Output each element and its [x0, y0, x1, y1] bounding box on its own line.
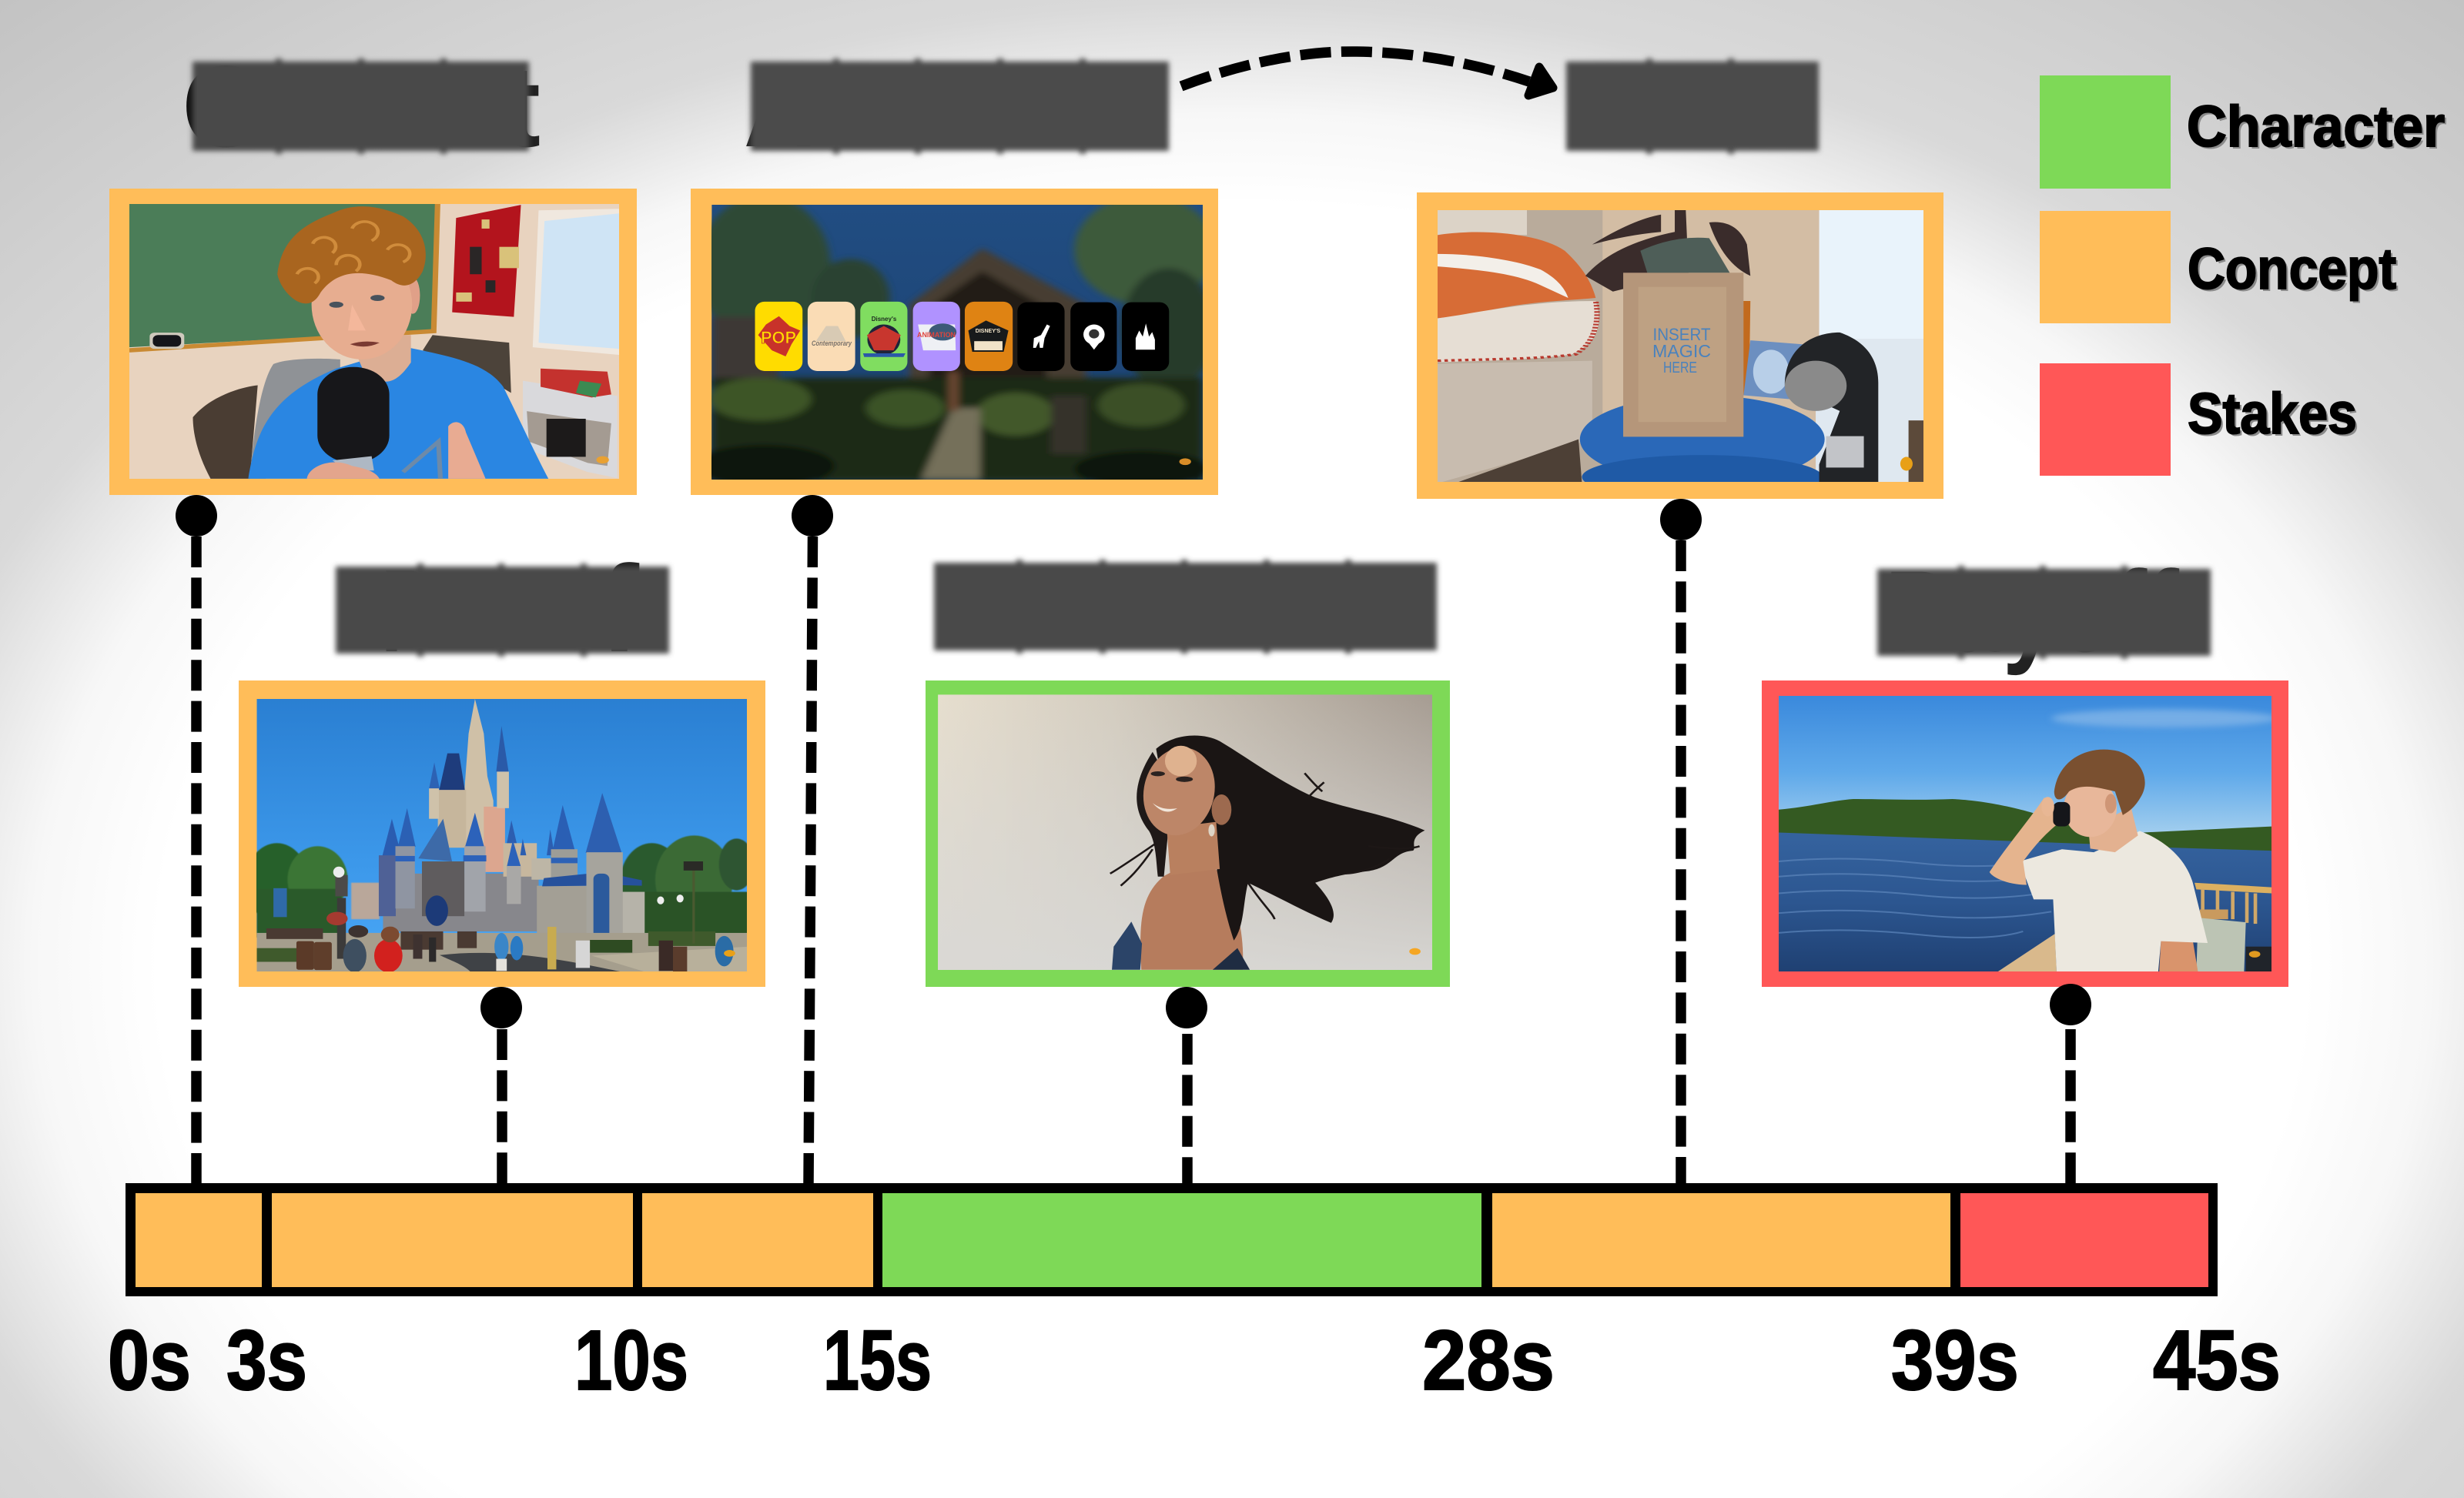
legend swatch: Concept	[2040, 211, 2171, 323]
photo: wooden frame on blue stool: HERE	[1663, 359, 1697, 376]
heading 1: redacted with blur	[182, 42, 541, 171]
arrow: dashed curve between headings	[1181, 52, 1553, 95]
segment: 10s to 15s concept	[642, 1193, 873, 1287]
panel: character frame (woman with flowing hair)	[926, 680, 1450, 987]
photo: resort lodge with brand cards: POP	[761, 328, 796, 347]
legend	[2040, 75, 2447, 476]
legend label: Stakes: Stakes	[2188, 381, 2357, 446]
panel: stakes frame (man on phone by the lake)	[1762, 680, 2288, 987]
label 10s: 10s	[574, 1313, 688, 1408]
heading 4: redacted with blur: P	[381, 546, 431, 677]
connector 4: dot and dashed line	[480, 987, 522, 1183]
photo: resort lodge with brand cards: Contemporary	[812, 339, 852, 347]
photo: wooden frame on blue stool: INSERT	[1652, 325, 1711, 344]
heading 4: redacted with blur: f	[601, 540, 640, 677]
photo: resort lodge with brand cards: ANIMATION	[917, 331, 956, 339]
timeline bar	[126, 1183, 2218, 1296]
photo: resort lodge with brand cards	[711, 205, 1203, 480]
connector 2: dot and dashed line	[792, 495, 833, 1183]
segment: 0s to 3s concept	[136, 1193, 262, 1287]
photo: woman turning with hair flying	[938, 694, 1433, 970]
photo: fairytale castle under blue sky	[245, 699, 755, 973]
heading 3: redacted with blur	[1566, 59, 1819, 154]
label 3s: 3s	[226, 1313, 307, 1408]
heading 1: redacted with blur: t	[502, 42, 541, 171]
segment: 15s to 28s character	[882, 1193, 1481, 1287]
heading 4: redacted with blur	[336, 540, 669, 677]
panel: concept frame (castle)	[239, 680, 765, 987]
photo: presenter with microphone	[129, 204, 621, 479]
time axis labels	[108, 1313, 2281, 1408]
panel: hook frame 1 (presenter)	[109, 189, 637, 495]
photo: man on phone beside water	[1779, 696, 2278, 972]
photo: wooden frame on blue stool	[1438, 210, 1926, 499]
legend label: Character: Character	[2187, 94, 2445, 159]
photo: resort lodge with brand cards: DISNEY'S	[976, 329, 1001, 334]
legend label: Concept: Concept	[2190, 239, 2399, 303]
heading 5: redacted with blur	[934, 560, 1437, 654]
label 39s: 39s	[1891, 1313, 2019, 1408]
connector 5: dot and dashed line	[1166, 987, 1207, 1183]
label 15s: 15s	[823, 1313, 932, 1408]
legend swatch: Character	[2040, 75, 2171, 189]
segment: 28s to 39s concept	[1492, 1193, 1950, 1287]
legend label: Character: Character	[2189, 96, 2447, 161]
legend label: Stakes: Stakes	[2190, 383, 2359, 448]
heading 2: redacted with blur	[744, 59, 1169, 167]
heading 1: redacted with blur: C	[182, 42, 265, 171]
panel: hook frame 2 (resort list)	[691, 189, 1218, 495]
legend label: Concept: Concept	[2188, 236, 2396, 301]
legend swatch: Stakes	[2040, 363, 2171, 476]
label 28s: 28s	[1422, 1313, 1555, 1408]
connector 3: dot and dashed line	[1660, 499, 1702, 1183]
heading 2: redacted with blur: A	[744, 60, 813, 167]
label 0s: 0s	[108, 1313, 191, 1408]
heading 6: redacted with blur: Payoff	[1885, 547, 2180, 676]
label 45s: 45s	[2153, 1313, 2281, 1408]
connector 6: dot and dashed line	[2050, 984, 2091, 1183]
photo: wooden frame on blue stool: MAGIC	[1652, 341, 1711, 361]
connector 1: dot and dashed line	[176, 495, 217, 1183]
panel: hook frame 3 (insert magic here)	[1417, 192, 1943, 499]
segment: 3s to 10s concept	[272, 1193, 633, 1287]
segment: 39s to 45s stakes	[1960, 1193, 2208, 1287]
photo: resort lodge with brand cards: Disney's	[872, 316, 897, 323]
